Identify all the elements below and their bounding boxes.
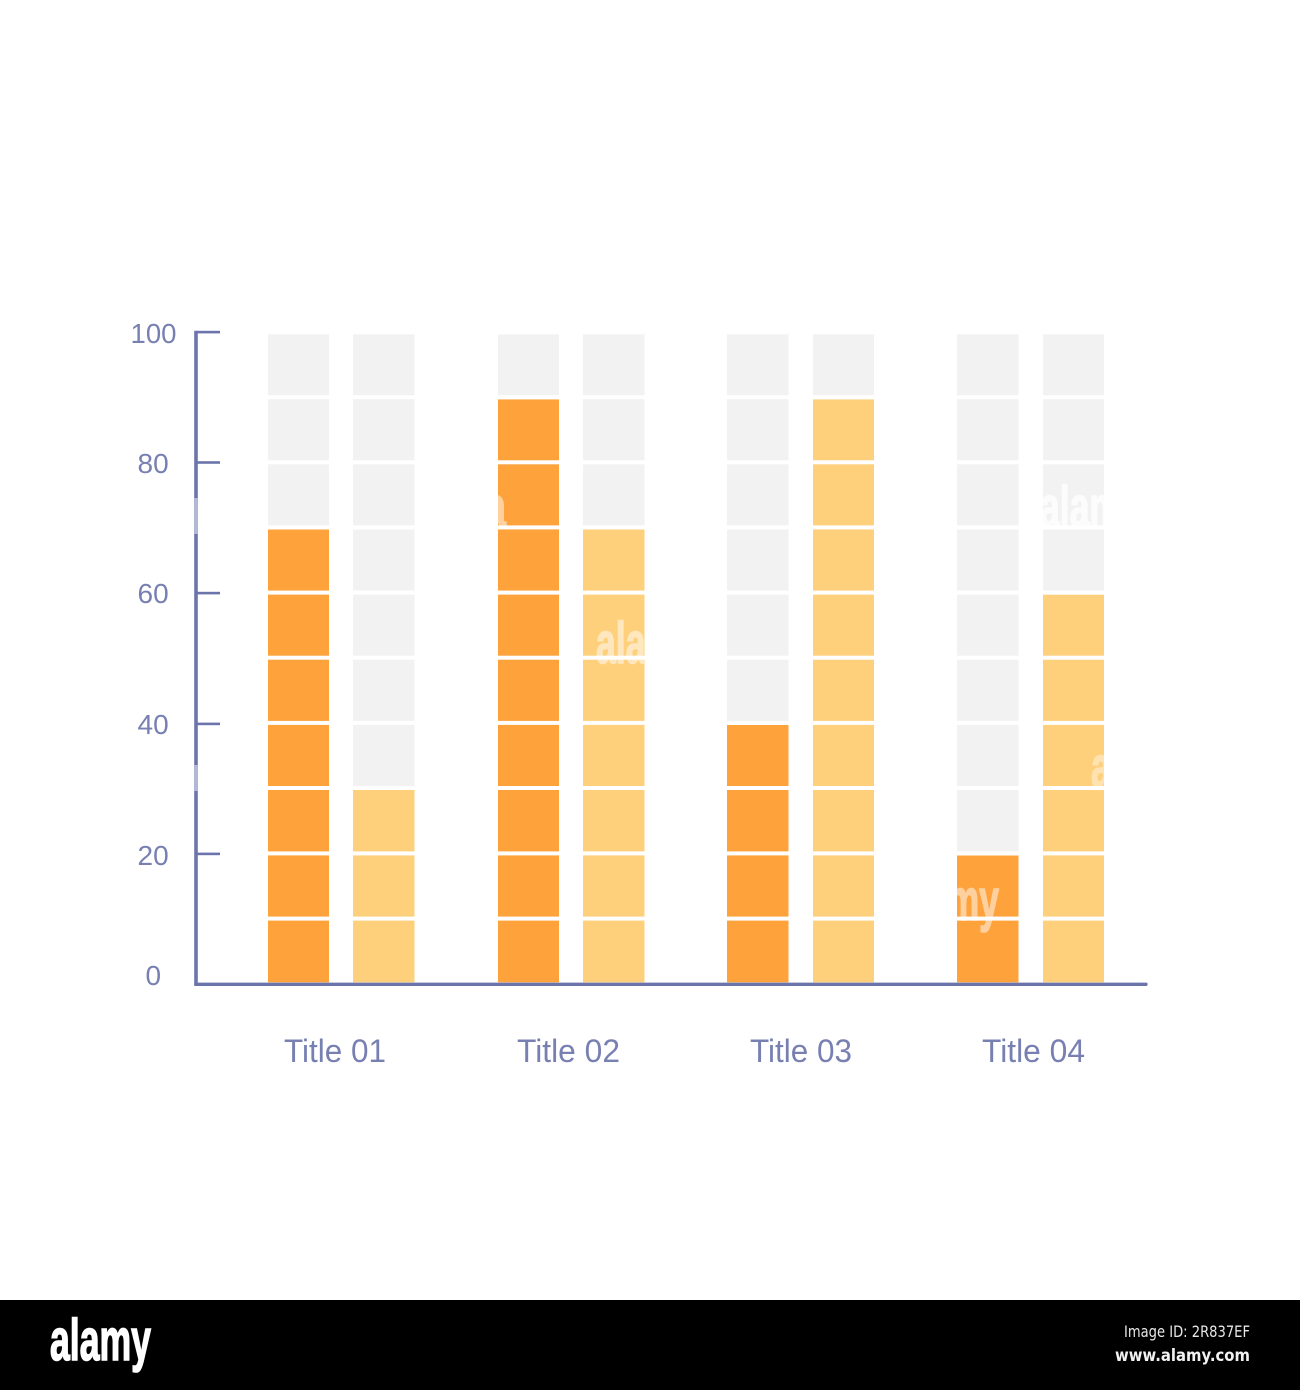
watermark fragments over bars: alamy: [1040, 475, 1141, 540]
bar: Title 04 series B, value 60: [1043, 334, 1104, 982]
group: Title 04 bars: [957, 334, 1104, 982]
footer logo: alamy: [50, 1308, 151, 1373]
watermark fragments over bars: a: [485, 475, 506, 540]
website: www.alamy.com: [1115, 1346, 1250, 1366]
bar: Title 02 series B, value 70: [583, 334, 644, 982]
footer bar: [0, 1300, 1300, 1390]
x axis category labels: Title 01: [284, 1033, 386, 1069]
grouped bar chart infographic: [0, 324, 1300, 1390]
watermark fragments over bars: [498, 484, 1104, 933]
bar: Title 03 series B, value 90: [813, 334, 874, 982]
watermark fragments over bars: alamy: [898, 868, 999, 933]
y axis labels: 60: [138, 578, 169, 609]
x axis category labels: Title 02: [517, 1033, 620, 1069]
group: Title 02 bars: [498, 334, 644, 982]
y axis labels: 0: [146, 960, 161, 991]
watermark fragments over bars: alamy: [596, 611, 697, 676]
y axis labels: 100: [130, 318, 176, 349]
x axis category labels: [284, 1033, 1085, 1069]
watermark fragments over bars: alamy: [1091, 735, 1192, 800]
bar: Title 01 series B, value 30: [353, 334, 414, 982]
x axis category labels: Title 04: [982, 1033, 1085, 1069]
group: Title 03 bars: [727, 334, 874, 982]
y axis labels: 20: [138, 840, 169, 871]
bar: Title 04 series A, value 20: [957, 334, 1018, 982]
bar: Title 02 series A, value 90: [498, 334, 559, 982]
y axis labels: [130, 318, 176, 991]
bar: Title 03 series A, value 40: [727, 334, 788, 982]
y axis labels: 40: [138, 709, 169, 740]
image id: Image ID: 2R837EF: [1124, 1322, 1250, 1341]
bar: Title 01 series A, value 70: [268, 334, 329, 982]
y axis with ticks: [194, 331, 220, 986]
x axis baseline: [194, 983, 1148, 986]
y axis labels: 80: [138, 448, 169, 479]
x axis category labels: Title 03: [750, 1033, 852, 1069]
group: Title 01 bars: [268, 334, 414, 982]
